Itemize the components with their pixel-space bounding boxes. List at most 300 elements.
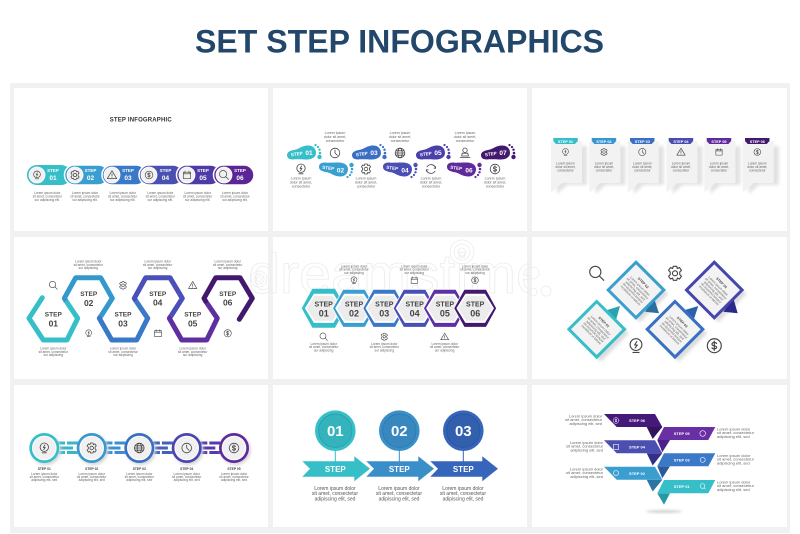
hexagon step 03 xyxy=(363,289,406,327)
arrow captions: sit amet, consectetur xyxy=(440,491,486,497)
hexagon captions: sit amet, consectetur xyxy=(74,263,104,267)
footprint captions: consectetur xyxy=(456,139,475,143)
hexagon row captions: Lorem ipsum dolor xyxy=(401,264,428,268)
step pill 03: STEP xyxy=(122,168,134,173)
hexagon step 02 xyxy=(333,289,375,327)
arrow captions: adipiscing elit, sed xyxy=(443,496,484,502)
hexagon icons xyxy=(49,281,231,337)
captions: sur adipiscing elit. xyxy=(110,198,135,202)
diamond step 04: sit amet, consectetur xyxy=(704,277,728,301)
footprint 05: STEP xyxy=(420,151,432,157)
hexagon row captions: sit amet, consectetur xyxy=(430,345,460,349)
hexagon captions: Lorem ipsum dolor xyxy=(75,260,102,264)
hexagon captions xyxy=(39,260,243,357)
arrow captions: sit amet, consectetur xyxy=(312,491,358,497)
captions: sit amet, consectetur xyxy=(146,194,176,198)
diamond step 03: STEP 03 xyxy=(676,316,688,329)
circle step 04: sit amet, consectetur xyxy=(172,475,202,479)
hexagon step 03: 03 xyxy=(379,308,389,318)
footprint captions: Lorem ipsum xyxy=(390,131,410,135)
funnel captions: sit amet, consectetur xyxy=(717,483,755,488)
footprint captions: Lorem ipsum xyxy=(325,131,345,135)
arrow captions: adipiscing elit, sed xyxy=(379,496,420,502)
footprint captions: consectetur xyxy=(357,184,376,188)
diamond step 03: do eiusmod tempor xyxy=(661,321,684,344)
funnel captions: Lorem ipsum dolor xyxy=(717,426,750,432)
diamond step 02: incididunt ut labore xyxy=(620,285,642,306)
hexagon step 04: STEP xyxy=(405,301,424,308)
arrow captions: adipiscing elit, sed xyxy=(315,496,356,502)
arrow step 02 xyxy=(366,410,434,481)
hexagon captions: sit amet, consectetur xyxy=(108,350,139,354)
funnel bar step 03: STEP 03 xyxy=(674,457,690,462)
captions: sur adipiscing elit. xyxy=(35,198,60,202)
panel: hexagon path xyxy=(14,237,268,379)
diamond step 01 xyxy=(569,302,629,362)
hexagon captions: sit amet, consectetur xyxy=(178,350,208,354)
arrow step 03: 03 xyxy=(455,423,472,440)
circle step 05: STEP 05 xyxy=(227,467,241,471)
hexagon row captions: sur adipiscing xyxy=(405,271,424,275)
arrow captions: Lorem ipsum dolor xyxy=(442,486,484,492)
footprint 07: 07 xyxy=(499,150,507,157)
arrow captions: sit amet, consectetur xyxy=(376,491,422,497)
arrow step 01 xyxy=(302,410,370,481)
hexagon row captions: sur adipiscing xyxy=(344,271,364,275)
hexagon labels: 04 xyxy=(153,297,163,307)
diamond step 03: sit amet, consectetur xyxy=(665,316,689,340)
hexagon row captions: sur adipiscing xyxy=(435,348,455,352)
funnel bar step 01: STEP 01 xyxy=(674,484,690,489)
hexagon labels: 05 xyxy=(188,318,198,328)
diamond step 04: STEP 04 xyxy=(715,277,728,289)
captions: Lorem ipsum dolor xyxy=(184,191,211,195)
captions xyxy=(33,191,251,202)
note card 03: dolor sit amet, xyxy=(632,165,652,169)
step pill 01 xyxy=(27,165,71,185)
hexagon row captions: sur adipiscing xyxy=(375,348,394,352)
note card 04: dolor sit amet, xyxy=(671,165,691,169)
funnel bar step 05 xyxy=(657,427,715,452)
footprint 01 xyxy=(287,144,322,160)
hexagon captions: sit amet, consectetur xyxy=(143,263,173,267)
step pill 05: 05 xyxy=(199,175,207,182)
connector bars xyxy=(58,443,220,452)
footprint captions: Lorem ipsum xyxy=(485,176,505,180)
circle step 05: adipiscing elit, sed xyxy=(221,478,247,482)
panel: arrows with numbered circles xyxy=(273,385,527,527)
hexagon row captions: sit amet, consectetur xyxy=(370,345,400,349)
hexagon captions: sur adipiscing xyxy=(113,353,133,357)
hexagon row captions: sur adipiscing xyxy=(314,348,334,352)
diamond step 02: STEP 02 xyxy=(637,277,649,289)
footprint 04 xyxy=(383,162,418,178)
note card 04: Lorem ipsum xyxy=(672,162,690,166)
footprint 04: STEP xyxy=(386,165,398,171)
captions: sit amet, consectetur xyxy=(108,194,138,198)
hexagon step 06 xyxy=(454,289,497,327)
diamond step 02 xyxy=(608,262,668,322)
funnel captions: Lorem ipsum dolor xyxy=(570,440,603,445)
step pill 04: STEP xyxy=(160,168,171,173)
diamond step 04 xyxy=(686,262,747,322)
hexagon row captions: Lorem ipsum dolor xyxy=(431,342,458,346)
circle step 04: Lorem ipsum dolor xyxy=(173,472,200,476)
step pill 02 xyxy=(64,165,108,185)
footprint captions: consectetur xyxy=(486,184,505,188)
diamond step 01: Lorem ipsum dolor xyxy=(590,315,611,336)
hexagon row captions: sit amet, consectetur xyxy=(309,345,339,349)
note card 05 xyxy=(705,138,740,194)
hexagon captions: Lorem ipsum dolor xyxy=(144,260,171,264)
captions: sit amet, consectetur xyxy=(33,194,63,198)
note card 01 xyxy=(552,138,587,194)
note card 02: STEP 02 xyxy=(596,140,612,144)
hexagon step 03: STEP xyxy=(375,301,394,308)
footprint 01: 01 xyxy=(305,150,313,157)
hexagon labels: STEP xyxy=(80,291,98,298)
footprint captions: dolor sit amet, xyxy=(484,180,506,184)
diamond step 03 xyxy=(647,302,707,362)
diamond step 04: incididunt ut labore xyxy=(698,285,720,306)
hexagon labels: 02 xyxy=(84,298,94,308)
step pill 02: STEP xyxy=(85,168,96,173)
note card 01: Lorem ipsum xyxy=(556,162,575,166)
circle step 01 xyxy=(29,433,61,482)
hexagon captions: sur adipiscing xyxy=(44,353,63,357)
captions: Lorem ipsum dolor xyxy=(147,191,174,195)
note card 06: consectetur xyxy=(749,168,766,172)
footprint captions: Lorem ipsum xyxy=(291,176,311,180)
funnel captions: adipiscing elit, sed xyxy=(570,474,603,479)
footprint captions: Lorem ipsum xyxy=(455,131,475,135)
circle step 01: Lorem ipsum dolor xyxy=(31,472,58,476)
step pill 05: STEP xyxy=(197,168,209,173)
arrow step 02: STEP xyxy=(389,465,410,474)
step pill 04: 04 xyxy=(162,175,169,182)
funnel bar step 04: STEP 04 xyxy=(629,444,646,450)
funnel captions: adipiscing elit, sed xyxy=(569,421,602,426)
hexagon row captions: sit amet, consectetur xyxy=(460,268,491,272)
circle step 01: sit amet, consectetur xyxy=(30,475,60,479)
diamond step 01: STEP 01 xyxy=(597,316,610,329)
arrow captions: Lorem ipsum dolor xyxy=(314,486,356,492)
note card 06: STEP 06 xyxy=(750,140,765,144)
note card 03 xyxy=(628,138,664,194)
diamond step 01: sit amet, consectetur xyxy=(586,316,611,340)
hexagon step 04: 04 xyxy=(410,308,420,318)
watermark spiral xyxy=(251,271,267,287)
note card 01: consectetur xyxy=(557,168,575,172)
circle step 02: adipiscing elit, sed xyxy=(79,478,105,482)
hexagon labels: STEP xyxy=(219,291,237,298)
footprint 07 xyxy=(481,144,516,160)
funnel shadow xyxy=(646,510,682,513)
captions: sit amet, consectetur xyxy=(70,194,101,198)
circle step 05: sit amet, consectetur xyxy=(219,475,250,479)
note card 05: STEP 05 xyxy=(711,140,727,144)
note card 03: STEP 03 xyxy=(635,140,650,144)
footprint captions: consectetur xyxy=(422,184,441,188)
hexagon step 04 xyxy=(393,289,436,327)
hexagon captions: sur adipiscing xyxy=(218,266,238,270)
diamond step 01: adipiscing elit, sed xyxy=(585,319,607,341)
panel: hexagon row xyxy=(248,237,548,379)
footprint 07: STEP xyxy=(485,151,497,157)
funnel captions: adipiscing elit, sed xyxy=(717,460,750,465)
captions: sur adipiscing elit. xyxy=(72,198,98,202)
hexagon step 06: 06 xyxy=(470,308,480,318)
hexagon step 01 xyxy=(302,289,345,327)
note card 04: consectetur xyxy=(673,168,690,172)
footprint captions: consectetur xyxy=(391,139,410,143)
circle step 02: Lorem ipsum dolor xyxy=(78,472,105,476)
footprint 02 xyxy=(319,162,354,178)
note card 03: Lorem ipsum xyxy=(633,162,652,166)
note card 05: Lorem ipsum xyxy=(710,162,728,166)
footprint 06: STEP xyxy=(450,165,462,171)
footprint captions: dolor sit amet, xyxy=(420,180,442,184)
circle step 04 xyxy=(172,433,203,482)
footprint captions: Lorem ipsum xyxy=(421,176,441,180)
captions: sur adipiscing elit. xyxy=(148,198,173,202)
footprint captions: dolor sit amet, xyxy=(389,135,411,139)
funnel captions: adipiscing elit, sed xyxy=(570,447,603,452)
footprint 01: STEP xyxy=(291,151,303,157)
diamond step 02: do eiusmod tempor xyxy=(622,282,645,305)
diamond step 04: do eiusmod tempor xyxy=(700,282,723,305)
diamond step 03: Lorem ipsum dolor xyxy=(668,315,690,336)
hexagon row captions: Lorem ipsum dolor xyxy=(462,264,488,268)
hexagon labels xyxy=(45,291,237,328)
circle step 03 xyxy=(124,433,156,482)
diamond step 03: incididunt ut labore xyxy=(659,324,681,346)
footprint captions: dolor sit amet, xyxy=(454,135,476,139)
captions: Lorem ipsum dolor xyxy=(72,191,98,195)
diamond step 01: do eiusmod tempor xyxy=(583,321,605,344)
hexagon labels: 06 xyxy=(223,297,233,307)
funnel bar step 06: STEP 06 xyxy=(629,418,646,423)
funnel bar step 05: STEP 05 xyxy=(674,431,690,436)
hexagon captions: Lorem ipsum dolor xyxy=(110,346,136,350)
circle step 04: adipiscing elit, sed xyxy=(174,478,200,482)
footprint captions: dolor sit amet, xyxy=(324,135,346,139)
funnel bar step 03 xyxy=(657,453,715,478)
funnel captions: Lorem ipsum dolor xyxy=(717,480,750,484)
hexagon row captions: sit amet, consectetur xyxy=(339,268,370,272)
arrow step 03 xyxy=(430,410,498,481)
hexagon captions: Lorem ipsum dolor xyxy=(40,346,67,350)
hexagon step 02: STEP xyxy=(345,301,363,308)
note card 06 xyxy=(743,138,779,194)
arrow step 03: STEP xyxy=(453,465,474,474)
step pill 03 xyxy=(102,165,146,185)
hexagon row captions: Lorem ipsum dolor xyxy=(371,342,398,346)
panel: circles with connectors xyxy=(14,385,268,527)
hexagon row captions xyxy=(309,264,491,352)
funnel captions: sit amet, consectetur xyxy=(566,444,604,449)
hexagon labels: 01 xyxy=(49,318,58,328)
funnel bar step 02: STEP 02 xyxy=(629,471,646,476)
circle step 01: STEP 01 xyxy=(38,467,51,471)
circle step 04: STEP 04 xyxy=(180,467,193,471)
footprint 06 xyxy=(447,162,482,178)
note card 04: STEP 04 xyxy=(673,140,689,144)
footprint captions: Lorem ipsum xyxy=(356,176,376,180)
circle step 05: Lorem ipsum dolor xyxy=(221,472,247,476)
hexagon step 05: 05 xyxy=(440,308,450,318)
step pill 01: 01 xyxy=(49,175,57,182)
funnel captions: sit amet, consectetur xyxy=(566,470,604,475)
step pill 06: STEP xyxy=(234,168,246,173)
hexagon captions: Lorem ipsum dolor xyxy=(214,260,241,264)
hexagon row icons xyxy=(320,277,478,340)
hexagon captions: sit amet, consectetur xyxy=(39,350,69,354)
hexagon captions: sur adipiscing xyxy=(148,266,168,270)
footprint 05: 05 xyxy=(434,150,442,157)
circle step 02 xyxy=(77,433,108,482)
footprint 03: STEP xyxy=(356,151,368,157)
hexagon row captions: Lorem ipsum dolor xyxy=(341,264,367,268)
captions: Lorem ipsum dolor xyxy=(109,191,136,195)
hexagon step 02: 02 xyxy=(349,308,359,318)
watermark: dreamstime xyxy=(248,242,548,305)
hexagon captions: Lorem ipsum dolor xyxy=(179,346,206,350)
circle step 02: sit amet, consectetur xyxy=(77,475,107,479)
funnel captions: Lorem ipsum dolor xyxy=(717,453,750,458)
arrow step 01: STEP xyxy=(325,465,346,474)
note card 02 xyxy=(590,138,626,194)
footprint captions: dolor sit amet, xyxy=(290,180,312,184)
watermark marks xyxy=(527,267,551,296)
footprint 03: 03 xyxy=(370,150,378,157)
step pill 01: STEP xyxy=(47,168,59,173)
arrow captions: Lorem ipsum dolor xyxy=(378,486,420,492)
hexagon row captions: sur adipiscing xyxy=(465,271,485,275)
funnel captions: Lorem ipsum dolor xyxy=(569,414,602,418)
note card 02: Lorem ipsum xyxy=(595,162,613,166)
diamond step 04: Lorem ipsum dolor xyxy=(707,275,729,297)
panel: footprint steps xyxy=(273,88,527,231)
panel: diamonds xyxy=(527,237,787,379)
hexagon labels: STEP xyxy=(149,291,167,298)
footprint icons xyxy=(297,148,500,174)
circle step 03: adipiscing elit, sed xyxy=(126,478,153,482)
note card 05: dolor sit amet, xyxy=(709,165,729,169)
funnel bar step 04 xyxy=(604,440,662,466)
footprint captions: dolor sit amet, xyxy=(355,180,377,184)
footprint 02: STEP xyxy=(322,165,334,171)
hexagon step 01: 01 xyxy=(319,308,329,318)
arrow captions xyxy=(312,486,486,502)
note card 02: dolor sit amet, xyxy=(594,165,614,169)
note card 05: consectetur xyxy=(711,168,728,172)
funnel captions: sit amet, consectetur xyxy=(717,430,755,435)
circle step 03: sit amet, consectetur xyxy=(125,475,155,479)
step pill 06 xyxy=(214,165,254,185)
hexagon captions: sit amet, consectetur xyxy=(213,263,243,267)
note card 01: dolor sit amet, xyxy=(555,165,576,169)
hexagon row captions: sit amet, consectetur xyxy=(400,268,430,272)
step pill 05 xyxy=(176,165,220,185)
hexagon labels: STEP xyxy=(45,312,62,318)
footprint 05 xyxy=(416,144,451,160)
step pill 06: 06 xyxy=(236,175,244,182)
footprint captions: consectetur xyxy=(292,184,311,188)
hexagon labels: STEP xyxy=(184,312,202,318)
funnel captions: sit amet, consectetur xyxy=(717,457,755,462)
note card 03: consectetur xyxy=(634,168,651,172)
panel: pill steps xyxy=(14,88,268,231)
funnel captions: adipiscing elit, sed xyxy=(717,487,750,492)
diamond step 04: adipiscing elit, sed xyxy=(703,280,724,302)
hexagon row captions: Lorem ipsum dolor xyxy=(310,342,337,346)
arrow step 02: 02 xyxy=(391,423,408,440)
hexagon captions: sur adipiscing xyxy=(183,353,203,357)
captions: sur adipiscing elit. xyxy=(222,198,248,202)
diamond step 02: adipiscing elit, sed xyxy=(625,280,646,302)
funnel bar step 02 xyxy=(604,467,662,492)
footprint captions: consectetur xyxy=(326,139,345,143)
circle step 02: STEP 02 xyxy=(85,467,98,471)
hexagon labels: STEP xyxy=(115,312,132,318)
panel: zigzag funnel xyxy=(532,385,787,527)
note card 04 xyxy=(667,138,702,194)
footprint captions xyxy=(290,131,506,188)
hexagon labels: 03 xyxy=(118,318,128,328)
step pill 02: 02 xyxy=(87,175,94,182)
hexagon step 01: STEP xyxy=(315,301,333,308)
heading: step infographic: STEP INFOGRAPHIC xyxy=(110,118,172,124)
diamond step 01: incididunt ut labore xyxy=(580,324,602,346)
circle step 05 xyxy=(219,433,251,482)
diamond step 02: Lorem ipsum dolor xyxy=(629,275,651,297)
note card 06: dolor sit amet, xyxy=(747,165,767,169)
circle step 03: Lorem ipsum dolor xyxy=(126,472,153,476)
footprint 04: 04 xyxy=(401,168,409,174)
captions: Lorem ipsum dolor xyxy=(34,191,61,195)
hexagon chain line xyxy=(29,278,252,340)
captions: sit amet, consectetur xyxy=(183,194,213,198)
footprint 03 xyxy=(352,144,387,160)
hexagon captions: sur adipiscing xyxy=(79,266,98,270)
funnel captions: adipiscing elit, sed xyxy=(717,434,750,439)
captions: sur adipiscing elit. xyxy=(185,198,210,202)
hexagon step 06: STEP xyxy=(466,301,485,308)
circle step 03: STEP 03 xyxy=(133,467,146,471)
funnel bar step 01 xyxy=(657,480,715,505)
funnel bar step 06 xyxy=(604,414,662,439)
diamond step 02: sit amet, consectetur xyxy=(626,277,650,301)
funnel captions xyxy=(565,414,755,492)
step pill 04 xyxy=(139,165,183,185)
hexagon step 05 xyxy=(424,289,466,327)
funnel captions: sit amet, consectetur xyxy=(565,417,603,422)
step pill 03: 03 xyxy=(124,175,132,182)
footprint 02: 02 xyxy=(337,168,344,174)
panel: note cards xyxy=(532,88,787,231)
diamond icons xyxy=(590,266,721,353)
title: SET STEP INFOGRAPHICS xyxy=(195,24,604,60)
hexagon step 05: STEP xyxy=(436,301,454,308)
note card 06: Lorem ipsum xyxy=(748,162,767,166)
footprint 06: 06 xyxy=(465,168,473,174)
funnel captions: Lorem ipsum dolor xyxy=(570,466,603,472)
arrow step 01: 01 xyxy=(327,423,344,440)
captions: sit amet, consectetur xyxy=(220,194,251,198)
circle step 01: adipiscing elit, sed xyxy=(31,478,58,482)
note card 02: consectetur xyxy=(596,168,613,172)
